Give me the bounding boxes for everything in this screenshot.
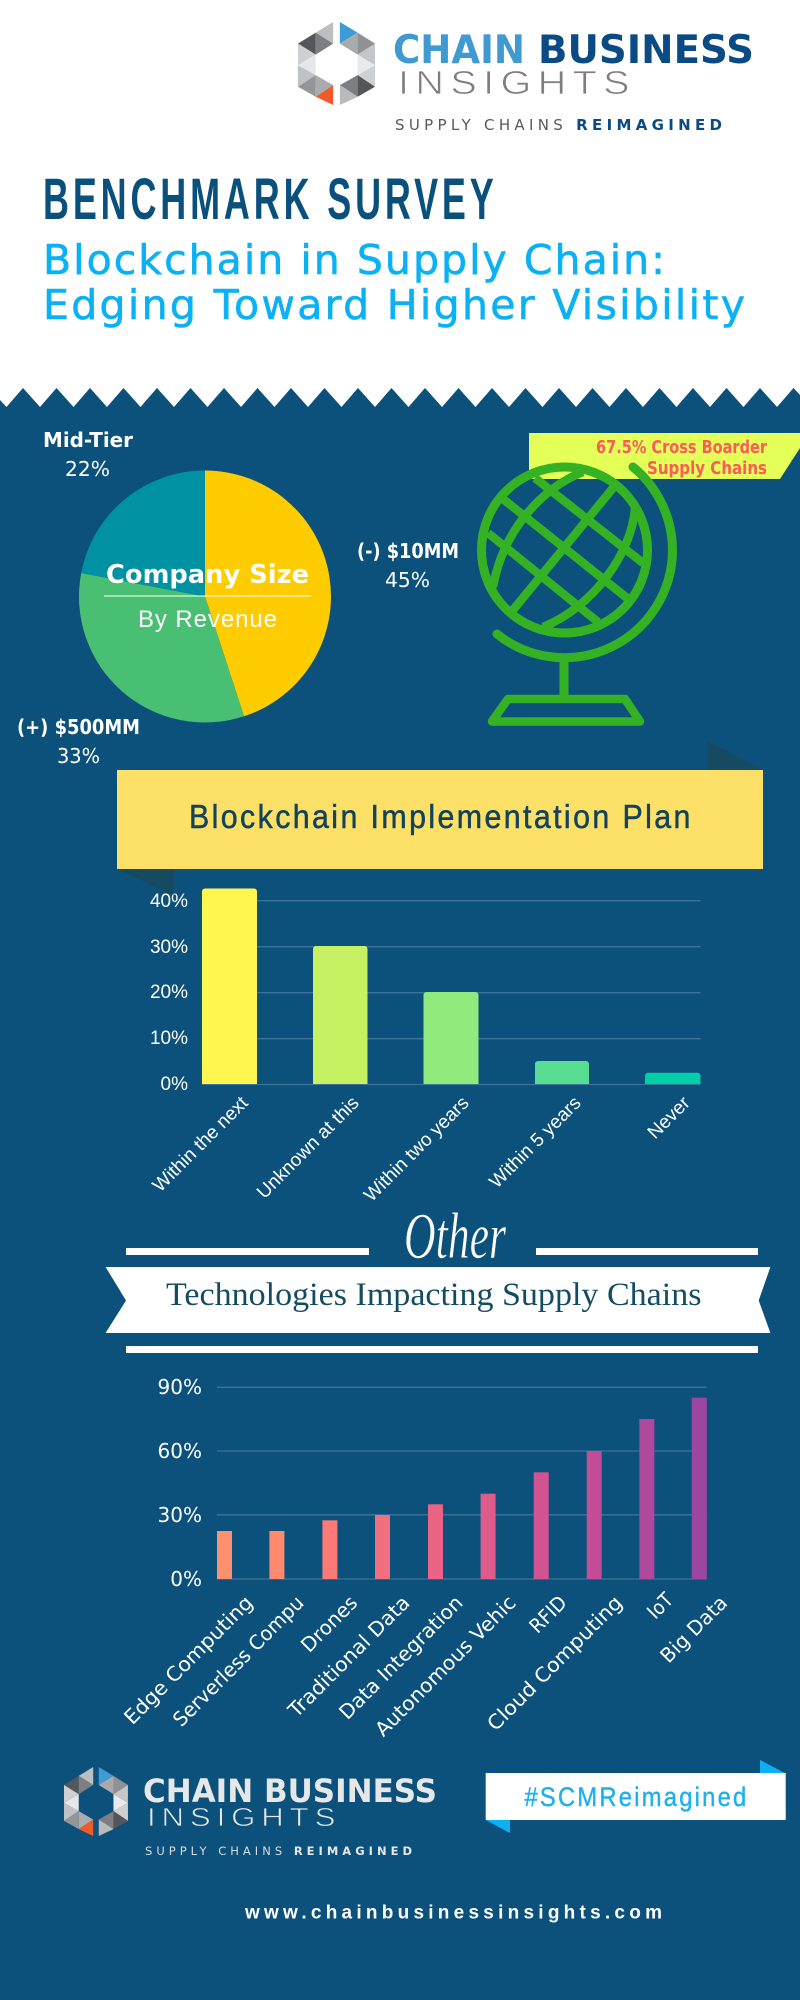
label: (-) $10MM: (-) $10MM	[357, 539, 459, 563]
logo word: BUSINESS: BUSINESS	[538, 28, 754, 73]
x axis labels: Traditional Data	[282, 1591, 415, 1723]
bar chart: blockchain implementation plan	[149, 888, 700, 1206]
icon: globe	[482, 467, 672, 722]
bars	[202, 888, 700, 1084]
pie slice: (-) $10MM 45%	[205, 470, 331, 716]
subtitle: Edging Toward Higher Visibility	[43, 281, 745, 329]
x axis labels: Never	[644, 1092, 695, 1143]
x axis labels: IoT	[642, 1587, 679, 1624]
ribbon: technologies impacting supply chains	[106, 1267, 770, 1333]
y axis labels: 30%	[158, 1503, 202, 1527]
icon: hexagon logo mark	[64, 1767, 128, 1836]
logo word: INSIGHTS: INSIGHTS	[398, 64, 630, 101]
x axis labels	[119, 1587, 732, 1741]
heading: Other: Other	[404, 1200, 506, 1273]
subtitle	[43, 236, 745, 329]
heading: Other	[126, 1200, 758, 1273]
label: (+) $500MM: (+) $500MM	[17, 715, 140, 739]
y axis labels: 10%	[150, 1028, 188, 1049]
x axis labels: RFID	[524, 1591, 572, 1638]
y axis labels: 0%	[161, 1074, 188, 1095]
x axis labels: Within the next	[149, 1092, 253, 1196]
y axis labels	[150, 891, 188, 1095]
x axis labels: Big Data	[655, 1591, 732, 1668]
y axis labels: 0%	[170, 1567, 202, 1591]
pie subtitle: By Revenue	[138, 606, 277, 633]
logo tagline: SUPPLY CHAINS REIMAGINED	[145, 1844, 412, 1858]
label: Mid-Tier: 22%	[65, 457, 110, 481]
panel: company size pie chart	[79, 470, 331, 722]
x axis labels: Autonomous Vehic	[370, 1591, 521, 1741]
ribbon: technologies impacting supply chains: Technologies Impacting Supply Chains	[166, 1277, 702, 1313]
bar chart: other technologies	[119, 1375, 732, 1741]
logo word: CHAIN: CHAIN	[393, 28, 525, 73]
label: (+) $500MM	[17, 715, 140, 768]
x axis labels: Serverless Compu	[168, 1591, 309, 1731]
x axis labels	[149, 1092, 695, 1206]
subtitle: Blockchain in Supply Chain:	[43, 236, 665, 284]
pie slice: (+) $500MM 33%	[79, 573, 244, 722]
label: (-) $10MM: 45%	[385, 568, 430, 592]
x axis labels: Drones	[296, 1591, 362, 1657]
banner: hashtag: #SCMReimagined	[524, 1783, 746, 1812]
label: Mid-Tier: Mid-Tier	[43, 428, 133, 452]
y axis labels: 40%	[150, 891, 188, 912]
icon: hexagon logo mark	[298, 22, 375, 105]
x axis labels: Data Integration	[334, 1591, 468, 1724]
chart gridlines	[217, 1387, 707, 1579]
label: Mid-Tier	[43, 428, 133, 481]
logo tagline: SUPPLY CHAINS REIMAGINED	[395, 116, 722, 134]
chart gridlines	[202, 901, 700, 1084]
title: BENCHMARK SURVEY	[43, 167, 494, 232]
banner: blockchain implementation plan: Blockchain Implementation Plan	[189, 798, 690, 835]
x axis labels: Edge Computing	[119, 1591, 258, 1729]
y axis labels: 30%	[150, 937, 188, 958]
bars	[217, 1398, 707, 1579]
logo word: INSIGHTS: INSIGHTS	[147, 1803, 335, 1832]
pie slice: Mid-Tier 22%	[81, 470, 205, 596]
label: (+) $500MM: 33%	[57, 744, 100, 768]
x axis labels: Within two years	[360, 1093, 474, 1206]
y axis labels	[158, 1375, 202, 1591]
x axis labels: Within 5 years	[486, 1093, 586, 1193]
callout: cross border supply chains tag	[529, 433, 800, 479]
banner: blockchain implementation plan	[117, 741, 763, 895]
website url: www.chainbusinessinsights.com	[244, 1902, 662, 1924]
banner: hashtag	[486, 1760, 786, 1833]
y axis labels: 20%	[150, 982, 188, 1003]
x axis labels: Unknown at this	[253, 1093, 364, 1203]
footer logo	[64, 1767, 437, 1858]
y axis labels: 60%	[158, 1439, 202, 1463]
header logo	[298, 22, 754, 134]
callout: cross border supply chains tag: Supply Chains	[647, 458, 767, 479]
logo wordmark: CHAIN BUSINESS	[143, 1772, 437, 1810]
label: (-) $10MM	[357, 539, 459, 592]
y axis labels: 90%	[158, 1375, 202, 1399]
pie title: Company Size	[106, 560, 309, 590]
x axis labels: Cloud Computing	[482, 1591, 627, 1736]
